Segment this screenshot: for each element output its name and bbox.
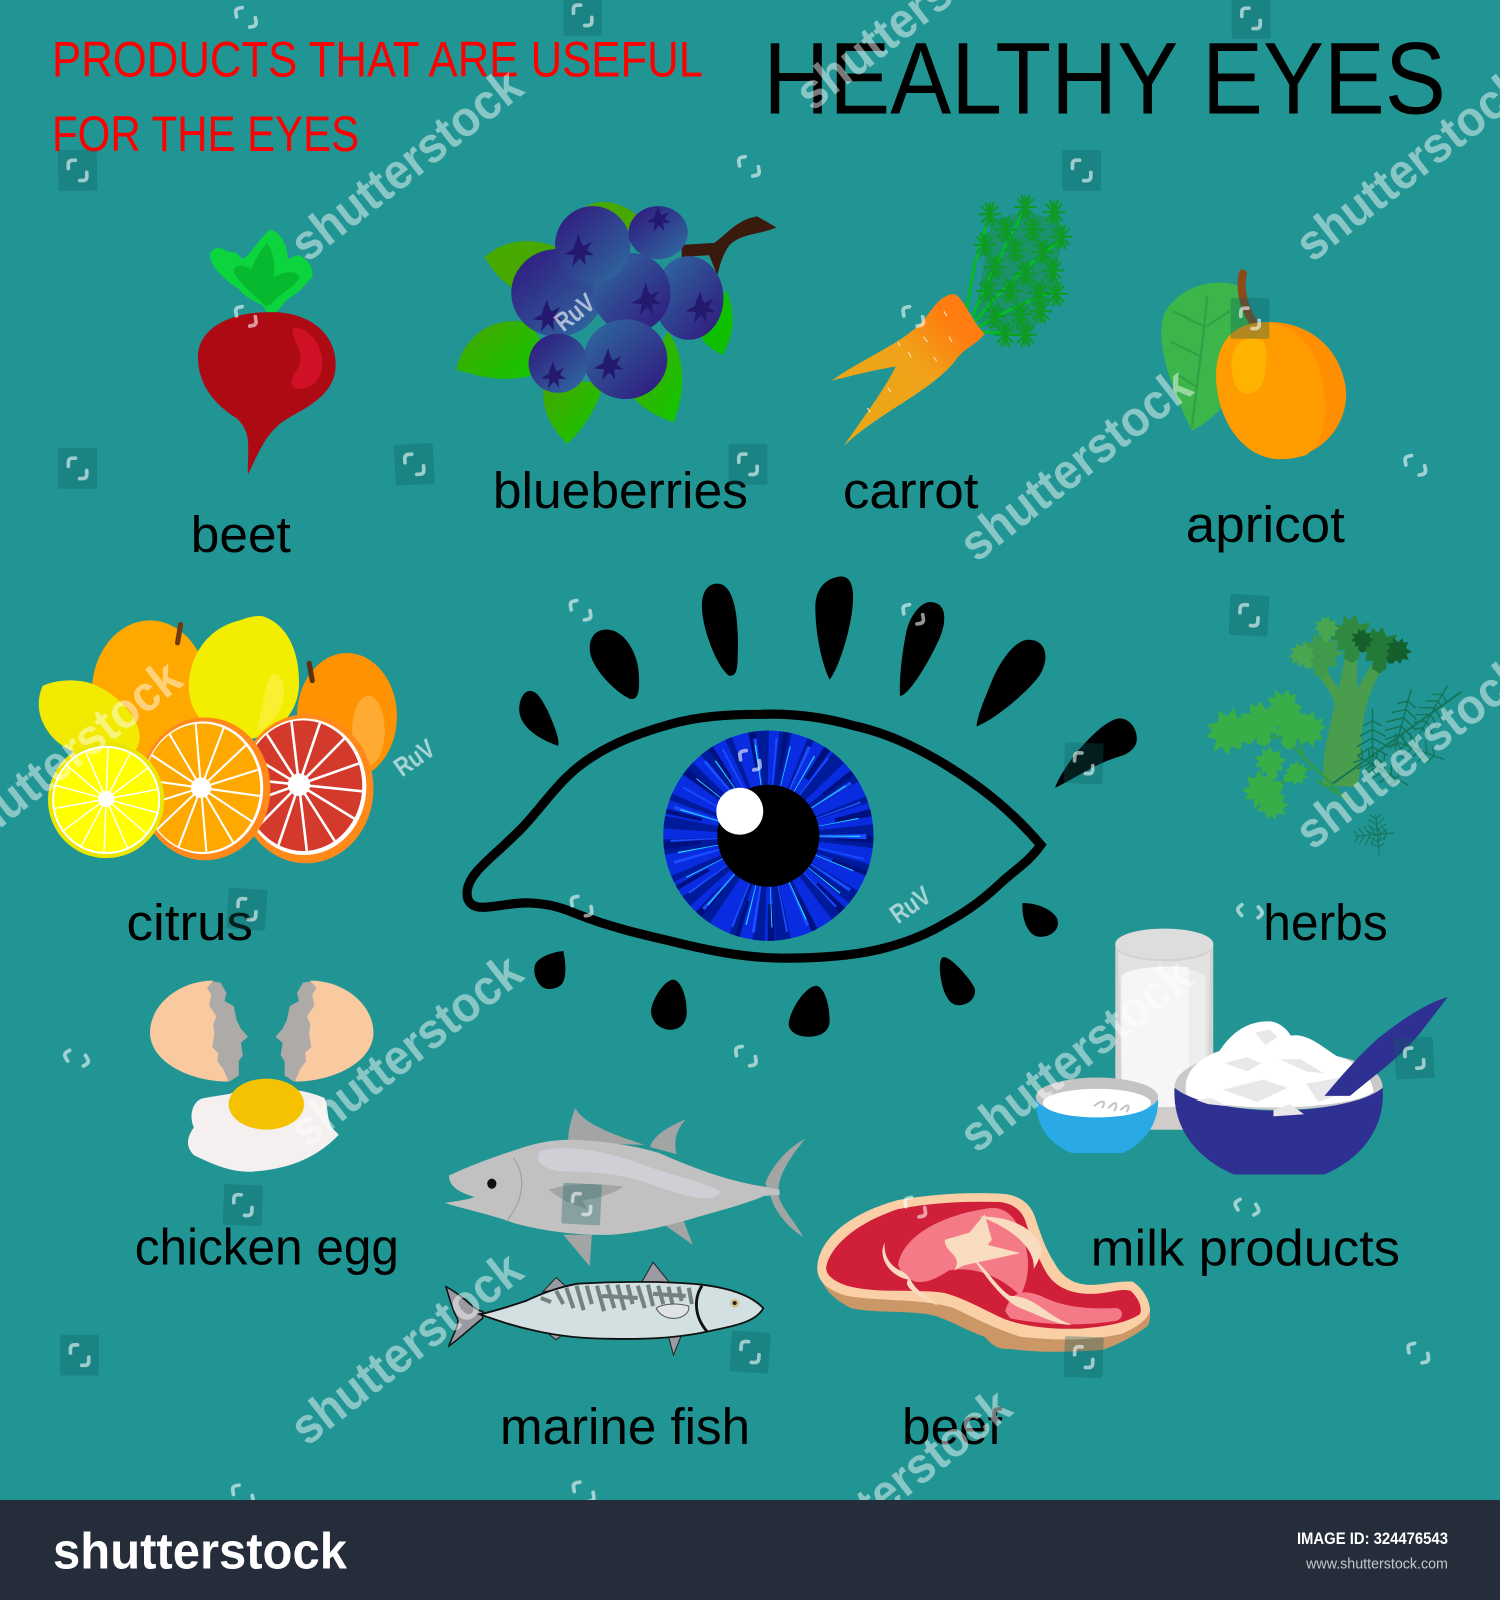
left shell (150, 981, 248, 1082)
pupil (717, 785, 819, 887)
label: carrot: carrot (843, 462, 979, 519)
right shell (276, 981, 373, 1082)
central eye (467, 576, 1137, 1037)
label: herbs: herbs (1263, 894, 1388, 951)
carrot root (832, 294, 985, 446)
RuV author marks: RuV (884, 880, 937, 929)
grapefruit slice (239, 714, 373, 863)
small bowl (1036, 1100, 1158, 1153)
cottage cheese (1186, 1021, 1373, 1107)
food: blueberries (456, 202, 777, 444)
shutterstock diagonal watermarks: shutterstock (949, 948, 1202, 1163)
food: beet (198, 230, 336, 474)
lemon slice (48, 742, 164, 858)
label: beef: beef (902, 1398, 1003, 1455)
mackerel (446, 1262, 763, 1355)
big bowl (1174, 1088, 1383, 1174)
carrot foliage mass (974, 212, 1061, 337)
spoon (1324, 997, 1448, 1096)
RuV author marks: RuV (388, 733, 441, 782)
food: chicken egg (150, 981, 373, 1172)
food: citrus (32, 616, 397, 872)
shutterstock diagonal watermarks: shutterstock (949, 357, 1202, 572)
fruit (1216, 322, 1346, 459)
orange slice (140, 717, 270, 860)
footer image id: IMAGE ID: 324476543 (1297, 1530, 1448, 1548)
branch (682, 216, 777, 276)
pupil highlight (716, 788, 763, 835)
dill (1333, 692, 1461, 784)
food: herbs (1202, 614, 1461, 856)
subtitle: products useful for the eyes (52, 32, 703, 162)
food: marine fish (445, 1108, 805, 1355)
label: marine fish: marine fish (500, 1398, 750, 1455)
eyelashes (519, 576, 1137, 1037)
shutterstock diagonal watermarks: shutterstock (279, 1240, 533, 1456)
label: citrus: citrus (127, 894, 253, 951)
top lemon (189, 616, 299, 740)
leaves (485, 241, 556, 296)
footer url: www.shutterstock.com (1305, 1556, 1448, 1572)
shutterstock diagonal watermarks: shutterstock (768, 1377, 1022, 1592)
RuV author marks: RuV (548, 287, 601, 337)
tuna (445, 1108, 805, 1266)
meat side (817, 1265, 1150, 1352)
carrot tops (964, 209, 1061, 337)
label: milk products: milk products (1091, 1219, 1400, 1276)
label: beet: beet (191, 506, 291, 563)
celery leaves (1283, 614, 1417, 679)
stem (1242, 273, 1257, 329)
iris (663, 731, 873, 941)
parsley (1230, 704, 1352, 801)
shutterstock diagonal watermarks: shutterstock (279, 943, 533, 1158)
shutterstock small icons with box (58, 0, 1435, 1378)
food: milk products (1036, 929, 1448, 1174)
berry calyxes (564, 234, 594, 266)
left lemon (39, 680, 140, 761)
label: apricot: apricot (1186, 496, 1345, 553)
back right orange (297, 653, 397, 780)
egg white (188, 1088, 339, 1172)
food: apricot (1161, 273, 1346, 459)
eye outline (467, 714, 1041, 958)
label: chicken egg: chicken egg (135, 1218, 399, 1275)
apricot leaf (1161, 283, 1255, 431)
red meat (826, 1202, 1141, 1329)
food: beef (817, 1193, 1150, 1352)
subtitle: products useful for the eyes: FOR THE EYES (52, 106, 359, 162)
fat rim (817, 1193, 1150, 1339)
footer bar (0, 1500, 1500, 1600)
marbling (882, 1214, 1071, 1325)
food: carrot (832, 195, 1072, 446)
celery stalks (1311, 658, 1383, 787)
berries (511, 249, 603, 337)
pink muscle (898, 1208, 1028, 1296)
RuV author marks (388, 287, 937, 929)
glass of milk (1115, 929, 1213, 1130)
footer logo: shutterstock (53, 1522, 348, 1579)
yolk (229, 1079, 304, 1130)
subtitle: products useful for the eyes: PRODUCTS THAT ARE USEFUL (52, 32, 703, 88)
label: blueberries: blueberries (493, 462, 748, 519)
shutterstock diagonal watermarks: shutterstock (279, 57, 533, 272)
back left orange (92, 620, 208, 763)
